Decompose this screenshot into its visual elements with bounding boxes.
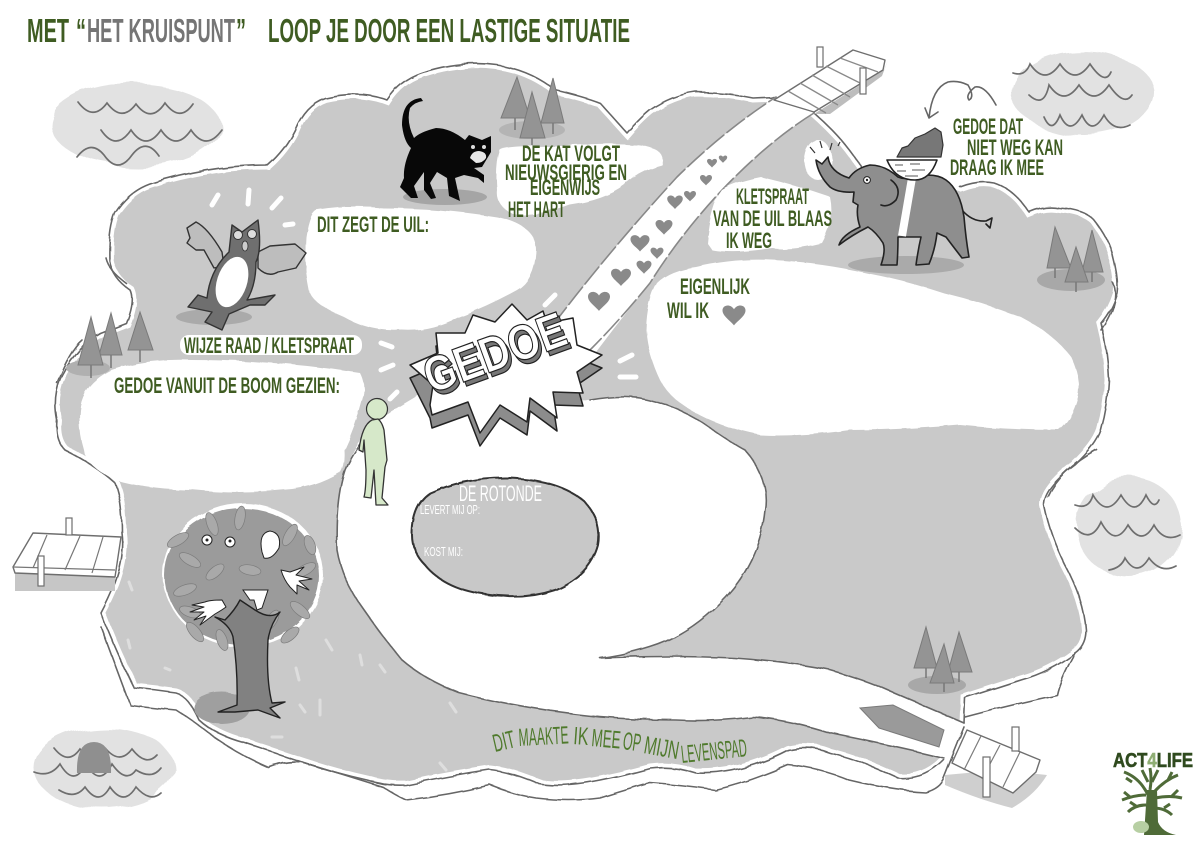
gedoe explosion: GEDOE — [416, 301, 574, 404]
title — [27, 12, 630, 49]
label: gedoe dat: NIET WEG KAN — [967, 135, 1063, 160]
hearts on the road — [588, 156, 727, 311]
owl belly — [210, 253, 254, 311]
road dashes — [381, 295, 636, 399]
trees: lake — [908, 627, 972, 694]
owl — [176, 190, 306, 330]
white blob: kletspraat — [707, 177, 831, 252]
trees: left — [66, 312, 153, 378]
label: kletspraat: IK WEG — [726, 228, 772, 253]
white blob: kat — [496, 144, 663, 215]
label: levenspad: MEE — [590, 724, 622, 755]
trees: top — [499, 77, 565, 145]
white blob: gedoe vanuit de boom — [80, 360, 364, 492]
logo: act4life: ACT4LIFE — [1113, 750, 1193, 772]
white blob: dit zegt de uil — [306, 207, 536, 330]
label: eigenlijk wil ik — [667, 274, 750, 325]
label: de kat volgt: NIEUWSGIERIG EN — [505, 160, 627, 185]
white blob: wijze raad — [180, 335, 362, 355]
elephant — [804, 128, 992, 274]
talking tree — [163, 503, 323, 724]
water: right — [1075, 476, 1181, 576]
trees: right — [1037, 227, 1105, 292]
gedoe explosion — [410, 301, 602, 446]
water: top left — [51, 84, 222, 166]
cat face — [470, 151, 486, 163]
bottom right jetty — [945, 727, 1047, 808]
label: de kat volgt: HET HART — [508, 197, 565, 222]
top jetty — [774, 47, 888, 114]
rotonde: DE ROTONDE — [459, 481, 542, 506]
label: eigenlijk wil ik: EIGENLIJK — [680, 274, 750, 299]
title: ” — [236, 12, 246, 49]
label: gedoe dat: GEDOE DAT — [953, 114, 1023, 139]
label: gedoe dat — [950, 114, 1063, 180]
gedoe explosion: GEDOE — [419, 305, 577, 408]
water: top right — [1012, 51, 1154, 135]
label: de kat volgt: DE KAT VOLGT — [522, 141, 620, 166]
label: de kat volgt — [505, 141, 627, 222]
label: levenspad: IK — [573, 722, 590, 751]
rotonde — [412, 478, 599, 597]
label: levenspad: MIJN — [642, 731, 681, 765]
outer shoreline — [57, 257, 1115, 800]
title: MET — [27, 12, 69, 49]
basket with rock — [887, 128, 943, 180]
rotonde: LEVERT MIJ OP: — [420, 502, 480, 517]
tree hand: right — [281, 567, 312, 594]
boat — [860, 705, 944, 747]
label: dit zegt de uil: DIT ZEGT DE UIL: — [317, 212, 429, 237]
title: “ — [76, 12, 86, 49]
tree ear — [261, 531, 280, 558]
title: HET KRUISPUNT — [87, 12, 235, 49]
label: levenspad: MAAKTE — [518, 721, 569, 752]
title: LOOP JE DOOR EEN LASTIGE SITUATIE — [268, 12, 630, 49]
label: levenspad: OP — [621, 727, 643, 757]
left jetty — [13, 518, 121, 591]
label: levenspad: DIT — [490, 726, 518, 758]
cat — [400, 98, 491, 205]
label: de kat volgt: EIGENWIJS — [530, 175, 600, 200]
label: kletspraat — [713, 184, 832, 253]
label: wijze raad: WIJZE RAAD / KLETSPRAAT — [184, 333, 354, 358]
person — [359, 398, 388, 505]
white road loop — [337, 395, 964, 758]
icon: seal — [77, 742, 111, 773]
flecks in the gray field — [128, 582, 456, 770]
water with seal — [33, 726, 173, 808]
tree trunk — [215, 600, 285, 718]
infographic map: LEVENSPAD — [680, 734, 748, 769]
white blob: eigenlijk wil ik — [646, 260, 1079, 435]
island — [55, 64, 1117, 800]
label: gedoe dat: DRAAG IK MEE — [950, 155, 1044, 180]
label: kletspraat: VAN DE UIL BLAAS — [713, 206, 832, 231]
road to top jetty — [545, 97, 814, 370]
rotonde: KOST MIJ: — [424, 544, 463, 559]
label: kletspraat: KLETSPRAAT — [736, 184, 809, 209]
label: levenspad — [490, 721, 748, 769]
arrow: gedoe in the loop — [925, 81, 996, 118]
tree mouth — [243, 590, 268, 610]
label: gedoe vanuit de boom: GEDOE VANUIT DE BOOM GEZIEN: — [114, 373, 340, 398]
label: eigenlijk wil ik: WIL IK — [667, 298, 709, 323]
tree hand: left — [190, 600, 226, 625]
logo: act4life — [1113, 750, 1193, 835]
